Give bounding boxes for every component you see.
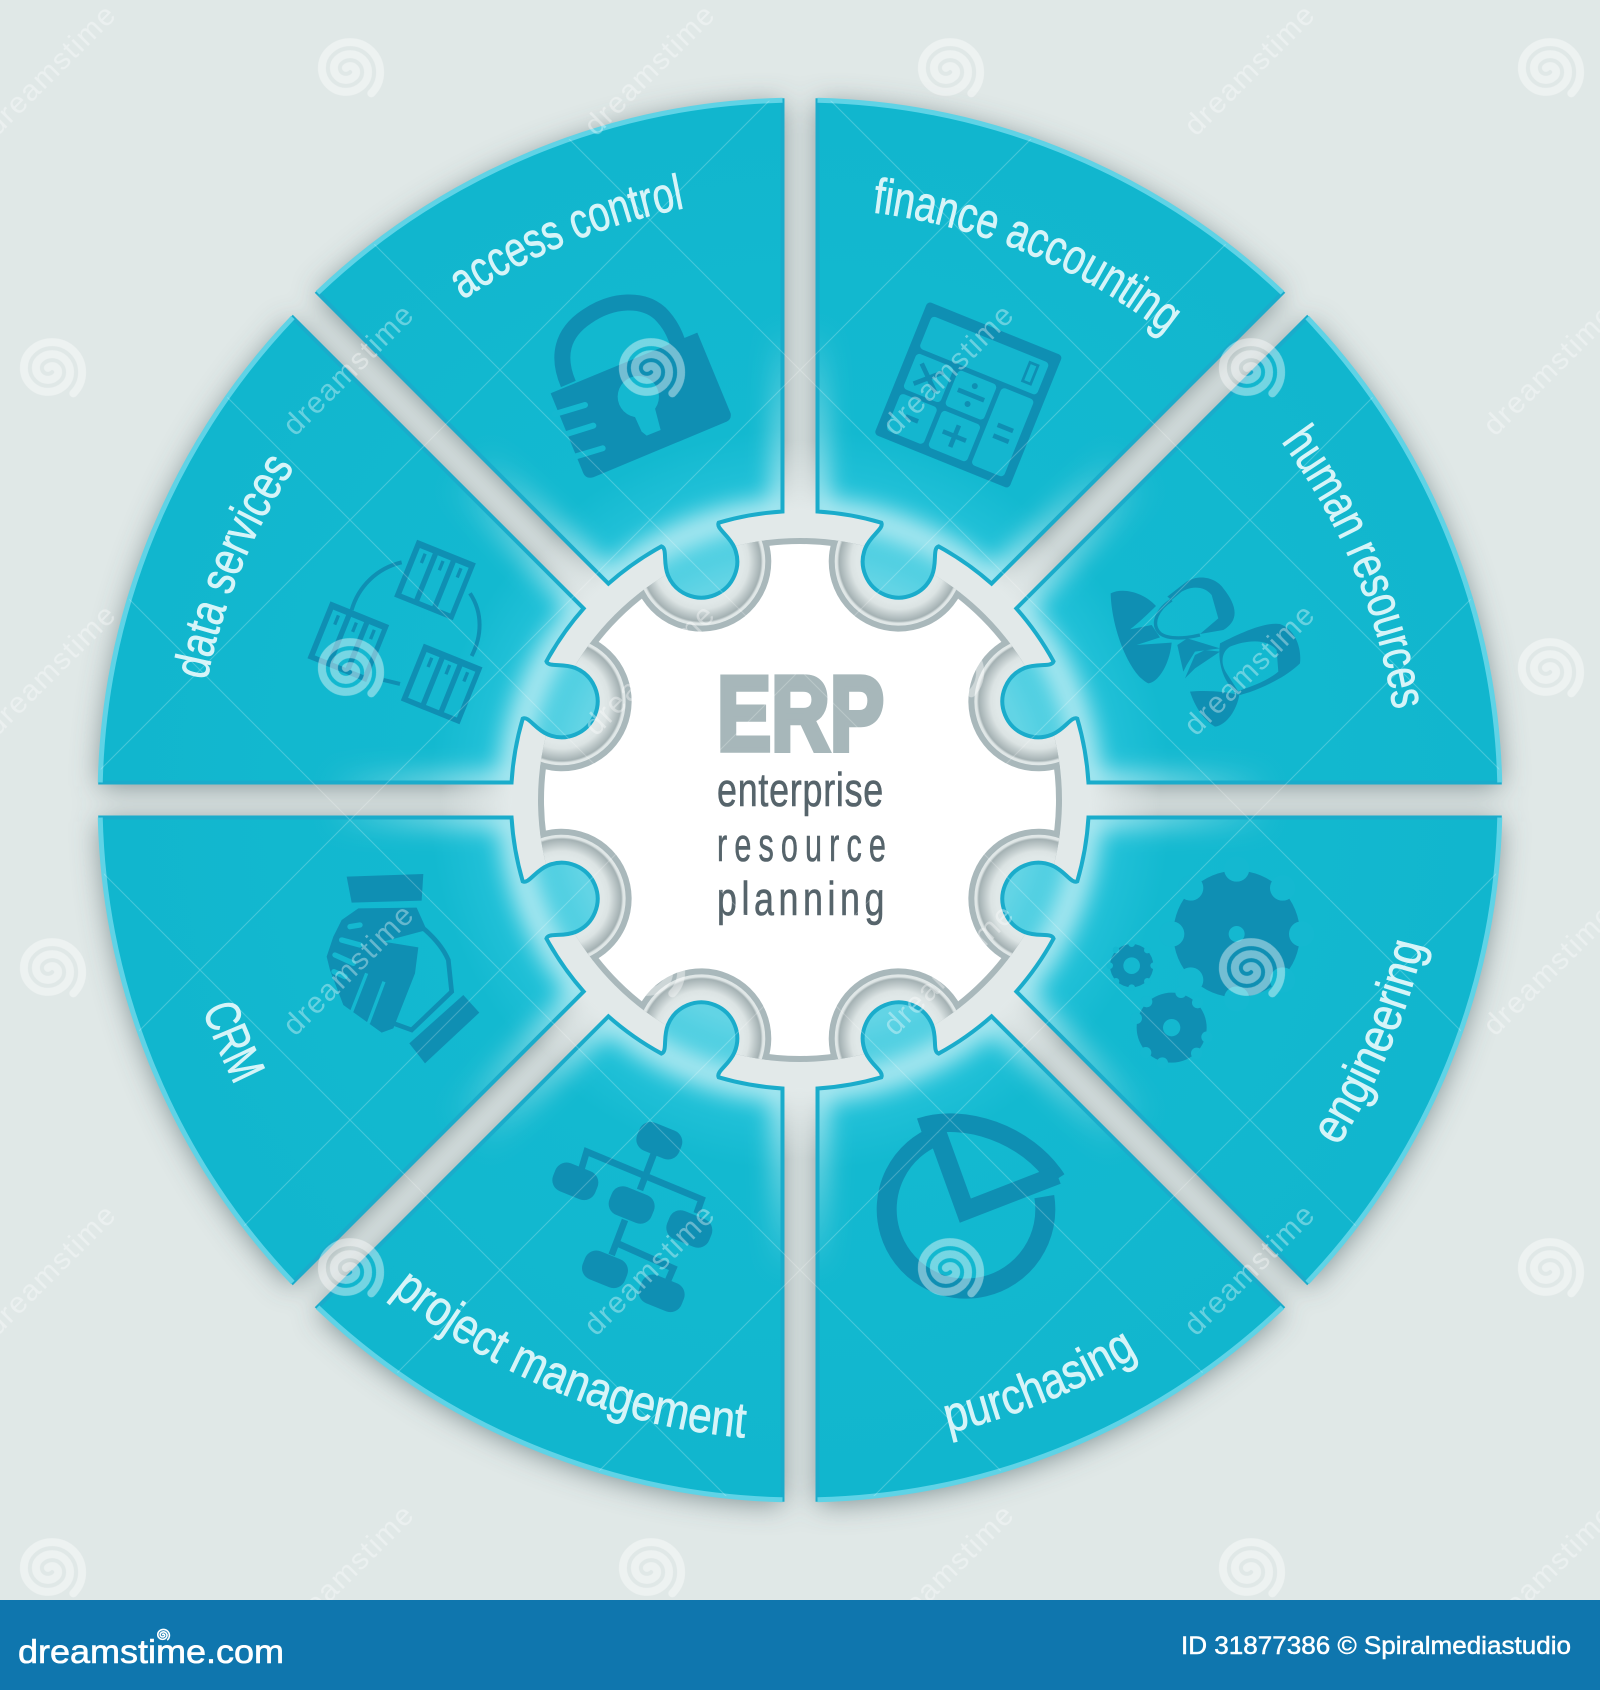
segment shape bbox=[300, 57, 947, 691]
central hub bbox=[538, 538, 1062, 1062]
icon: people bbox=[1111, 577, 1300, 727]
segment shape bbox=[653, 909, 1300, 1543]
icon: gears bbox=[1106, 856, 1314, 1069]
segment shape bbox=[909, 300, 1543, 947]
label: CRM bbox=[206, 1002, 266, 1084]
footer logo icon bbox=[156, 1627, 172, 1643]
panel: CRM bbox=[98, 816, 600, 1286]
icon: padlock bbox=[551, 302, 731, 478]
watermark: dreamstime text: dreamstime bbox=[877, 299, 1020, 442]
watermark: dreamstime text: dreamstime bbox=[578, 599, 721, 742]
watermark: dreamstime text: dreamstime bbox=[277, 299, 420, 442]
panel: human resources bbox=[1000, 314, 1502, 784]
watermark: dreamstime text: dreamstime bbox=[277, 899, 420, 1042]
watermark: dreamstime text: dreamstime bbox=[877, 1499, 1020, 1642]
label: access control bbox=[452, 172, 683, 298]
panel: purchasing bbox=[816, 1000, 1286, 1502]
label: project management bbox=[386, 1273, 747, 1438]
footer logo text: dreamstime.com bbox=[18, 1633, 284, 1670]
icon: calculator bbox=[874, 301, 1063, 489]
label: human resources bbox=[1282, 422, 1419, 708]
footer credit: ID 31877386 © Spiralmediastudio bbox=[1181, 1632, 1571, 1660]
icon: pie chart bbox=[887, 1123, 1057, 1289]
panel: finance accounting bbox=[816, 98, 1286, 600]
segment shape bbox=[57, 300, 691, 947]
label: purchasing bbox=[944, 1333, 1138, 1443]
panel: engineering bbox=[1000, 816, 1502, 1286]
segment shape bbox=[653, 57, 1300, 691]
label: engineering bbox=[1320, 940, 1432, 1142]
watermark: diagonal lines bbox=[100, 100, 1500, 1500]
subtitle line 1: enterprise bbox=[717, 763, 884, 816]
footer bar bbox=[0, 1600, 1600, 1690]
icon: org chart bbox=[549, 1118, 716, 1316]
centre title bbox=[717, 655, 893, 925]
subtitle line 3: planning bbox=[717, 872, 889, 925]
hub background fade bbox=[400, 400, 1200, 1200]
hub notches bbox=[474, 474, 1126, 1126]
watermark: dreamstime text: dreamstime bbox=[1178, 0, 1321, 142]
icon: handshake bbox=[327, 874, 479, 1063]
label: data services bbox=[174, 456, 292, 678]
watermark: dreamstime text: dreamstime bbox=[1178, 599, 1321, 742]
segment shape bbox=[300, 909, 947, 1543]
segment shape bbox=[909, 653, 1543, 1300]
heading: ERP: ERP bbox=[717, 655, 884, 773]
watermark: dreamstime text: dreamstime bbox=[277, 1499, 420, 1642]
footer background bbox=[0, 1600, 1600, 1690]
watermark: dreamstime text: dreamstime bbox=[578, 1199, 721, 1342]
white centre disc bbox=[541, 541, 1059, 1059]
panel: access control bbox=[314, 98, 784, 600]
label: finance accounting bbox=[875, 177, 1180, 338]
panel: data services bbox=[98, 314, 600, 784]
panel: project management bbox=[314, 1000, 784, 1502]
segment shape bbox=[57, 653, 691, 1300]
subtitle line 2: resource bbox=[717, 818, 893, 871]
icon: servers bbox=[307, 540, 482, 724]
watermark: dreamstime text: dreamstime bbox=[877, 899, 1020, 1042]
watermark: dreamstime text: dreamstime bbox=[578, 0, 721, 142]
watermark: dreamstime text: dreamstime bbox=[1178, 1199, 1321, 1342]
